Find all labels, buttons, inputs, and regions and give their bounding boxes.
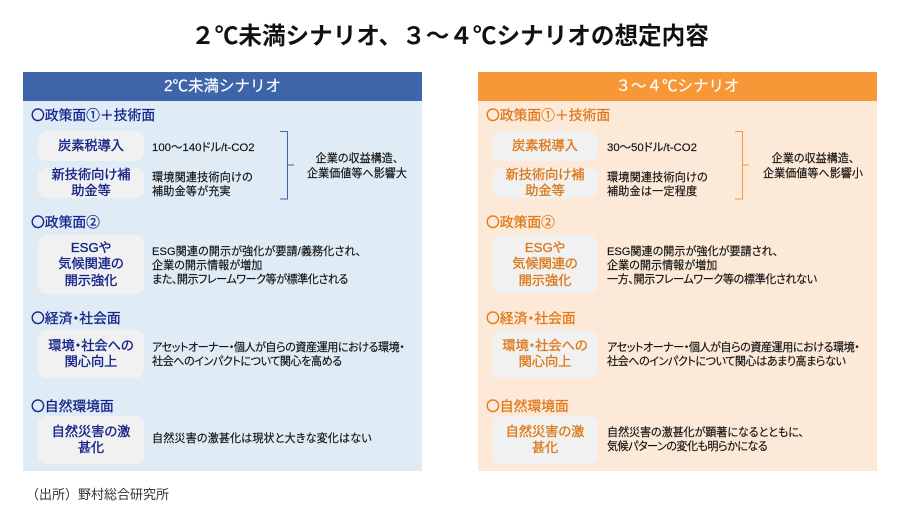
section heading: policy 2: 〇政策面② <box>486 215 555 230</box>
section heading: economy and society: 〇経済・社会面 <box>31 311 121 326</box>
text: effect on corporate value: 企業価値等へ影響小 <box>763 168 863 180</box>
chip: ESG disclosure <box>492 235 598 294</box>
text: asset owner interest: アセットオーナー・個人が自らの資産運用における環境・ <box>607 342 859 354</box>
chip: natural disasters <box>492 416 598 464</box>
chip: technology subsidies: 助金等 <box>525 183 565 198</box>
section heading: natural environment: 〇自然環境面 <box>486 399 569 414</box>
text: carbon tax price: 100～140ドル/t-CO2 <box>152 142 255 154</box>
text: carbon tax price: 30～50ドル/t-CO2 <box>607 142 697 154</box>
text: effect on corporate value: 企業の収益構造、 <box>772 153 854 165</box>
text: asset owner interest <box>152 341 404 368</box>
chip: environmental and social interest <box>38 330 144 378</box>
panel: 2°C scenario <box>23 72 422 471</box>
text: ESG disclosure detail: 企業の開示情報が増加 <box>152 260 262 272</box>
text: effect on corporate value <box>763 152 863 180</box>
text: ESG disclosure detail: 一方、開示フレームワーク等の標準化されない <box>607 274 817 286</box>
chip: natural disasters: 自然災害の激 <box>52 424 130 438</box>
text: effect on corporate value: 企業価値等へ影響大 <box>307 168 407 180</box>
text: technology subsidies detail <box>607 171 708 198</box>
text: effect on corporate value: 企業の収益構造、 <box>316 153 398 165</box>
text: natural disasters detail <box>607 426 804 453</box>
chip: technology subsidies <box>38 168 144 198</box>
text: asset owner interest: 社会へのインパクトについて関心を高める <box>152 356 342 368</box>
text: technology subsidies detail: 補助金等が充実 <box>152 186 231 198</box>
chip: natural disasters: 甚化 <box>532 440 558 455</box>
section heading: economy and society: 〇経済・社会面 <box>486 311 576 326</box>
bracket <box>280 131 294 200</box>
chip: technology subsidies: 助金等 <box>71 183 111 198</box>
text: effect on corporate value <box>307 152 407 180</box>
text: ESG disclosure detail: ESG関連の開示が強化が要請され、 <box>607 246 778 258</box>
chip: technology subsidies: 新技術向け補 <box>506 166 584 182</box>
panel header: 3-4°C <box>478 72 877 101</box>
panel header: 2°C: 2℃未満シナリオ <box>164 78 281 95</box>
chip: carbon tax <box>38 131 144 161</box>
section heading: policy 2: 〇政策面② <box>31 215 100 230</box>
text: technology subsidies detail: 環境関連技術向けの <box>607 172 708 184</box>
chip: ESG disclosure: 開示強化 <box>519 273 571 288</box>
text: ESG disclosure detail <box>152 245 361 286</box>
section heading: natural environment: 〇自然環境面 <box>31 399 114 414</box>
chip: environmental and social interest: 関心向上 <box>65 354 117 369</box>
source note: （出所）野村総合研究所 <box>26 487 169 502</box>
chip: natural disasters: 自然災害の激 <box>506 424 584 438</box>
chip: ESG disclosure: 気候関連の <box>512 256 578 271</box>
chip: ESG disclosure: ESGや <box>525 240 565 255</box>
chip: environmental and social interest: 環境・社会への <box>502 338 588 352</box>
chip: natural disasters: 甚化 <box>78 440 104 455</box>
panel header: 3-4°C: ３～４℃シナリオ <box>615 78 740 95</box>
chip: carbon tax <box>492 131 598 161</box>
title: ２℃未満シナリオ、３～４℃シナリオの想定内容 <box>191 24 709 50</box>
chip: environmental and social interest: 関心向上 <box>519 354 571 369</box>
chip: ESG disclosure: 開示強化 <box>65 273 117 288</box>
text: ESG disclosure detail: 企業の開示情報が増加 <box>607 260 717 272</box>
chip: environmental and social interest: 環境・社会への <box>48 338 134 352</box>
chip: technology subsidies: 新技術向け補 <box>52 166 130 182</box>
chip: ESG disclosure: ESGや <box>71 240 111 255</box>
chip: ESG disclosure <box>38 235 144 294</box>
text: ESG disclosure detail: ESG関連の開示が強化が要請/義務化され、 <box>152 246 361 258</box>
chip: carbon tax: 炭素税導入 <box>58 138 124 153</box>
text: asset owner interest: 社会へのインパクトについて関心はあまり高まらない <box>607 356 845 368</box>
chip: ESG disclosure: 気候関連の <box>58 256 124 271</box>
text: asset owner interest: アセットオーナー・個人が自らの資産運用における環境・ <box>152 342 404 354</box>
text: natural disasters detail: 気候パターンの変化も明らかになる <box>607 441 767 453</box>
chip: carbon tax: 炭素税導入 <box>512 138 578 153</box>
text: natural disasters detail: 自然災害の激甚化は現状と大きな変化はない <box>152 433 372 445</box>
panel header: 2°C <box>23 72 422 101</box>
chip: technology subsidies <box>492 168 598 198</box>
text: ESG disclosure detail: また、開示フレームワーク等が標準化される <box>152 274 348 286</box>
text: asset owner interest <box>607 341 859 368</box>
section heading: policy 1 and technology: 〇政策面①＋技術面 <box>486 108 610 123</box>
bracket <box>735 131 749 200</box>
text: technology subsidies detail <box>152 171 253 198</box>
chip: natural disasters <box>38 416 144 464</box>
chip: environmental and social interest <box>492 330 598 378</box>
text: technology subsidies detail: 補助金は一定程度 <box>607 186 697 198</box>
text: natural disasters detail: 自然災害の激甚化が顕著になるとともに、 <box>607 427 804 439</box>
panel: 3-4°C scenario <box>478 72 877 471</box>
text: ESG disclosure detail <box>607 245 817 286</box>
section heading: policy 1 and technology: 〇政策面①＋技術面 <box>31 108 155 123</box>
text: technology subsidies detail: 環境関連技術向けの <box>152 172 253 184</box>
